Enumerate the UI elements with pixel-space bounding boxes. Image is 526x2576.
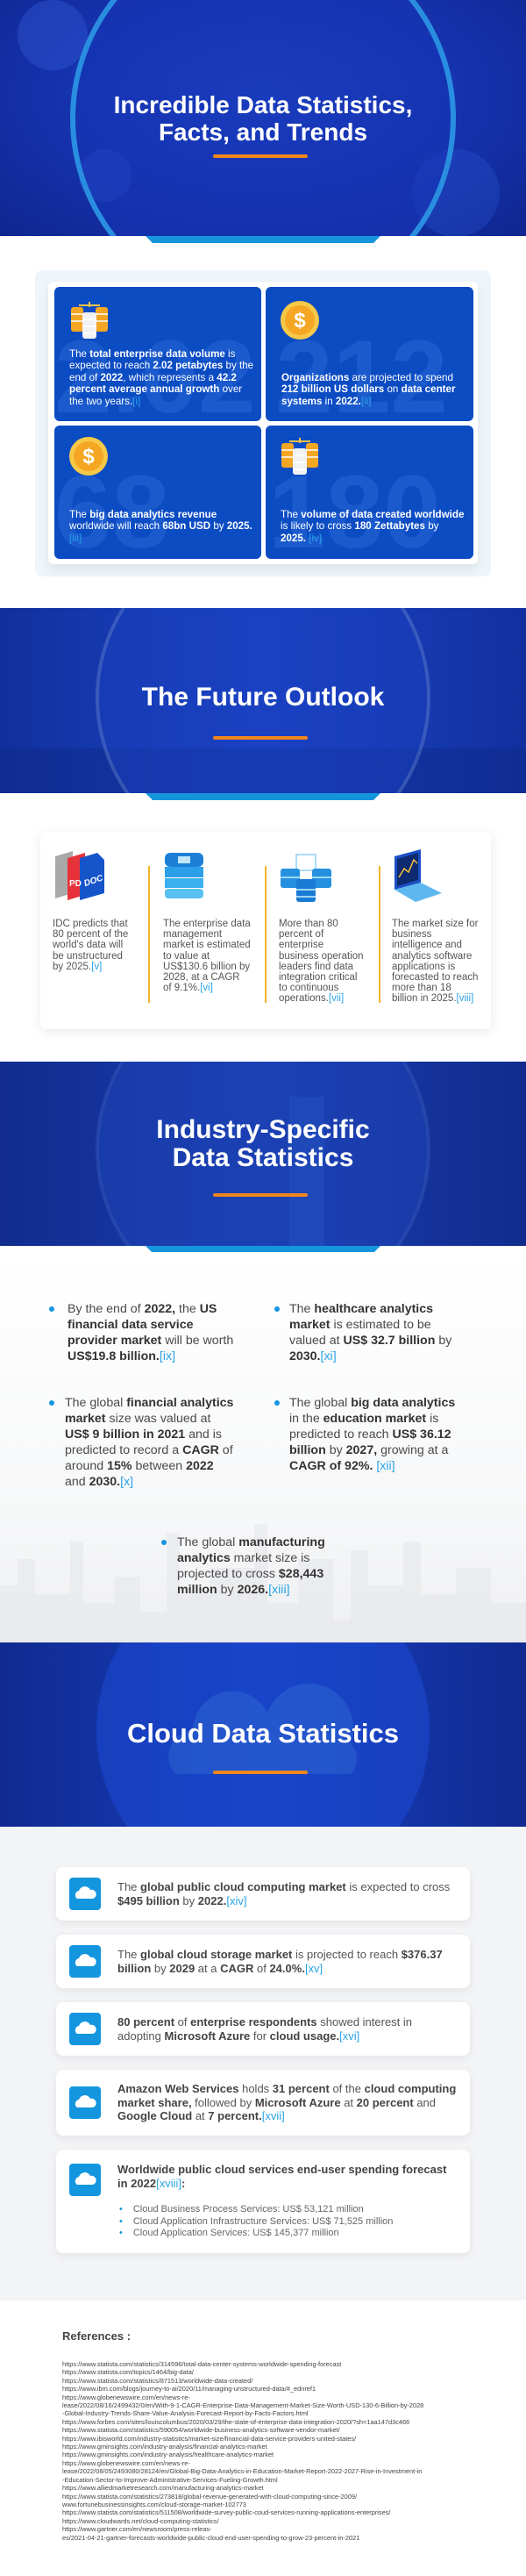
cloud card 2: The global cloud storage market is projected to reach $376.37 billion by 2029 at a CAGR of 24.0%.[xv] xyxy=(117,1948,443,1974)
title xyxy=(156,1115,370,1172)
references list: https://www.statista.com/statistics/273818/global-revenue-generated-with-cloud-computing-since-2009/ xyxy=(62,2492,357,2501)
card: data volume created: The volume of data created worldwide is likely to cross 180 Zettabytes by 2025. [iv] xyxy=(281,509,464,544)
hero title xyxy=(114,91,412,146)
icon: coin: $ xyxy=(294,309,306,333)
references list: https://www.cloudwards.net/cloud-computing-statistics/ xyxy=(62,2517,219,2525)
title: The Future Outlook xyxy=(142,683,384,712)
icon: server cluster xyxy=(281,854,331,902)
references list: lease/2022/08/16/2499432/0/en/With-9-1-CAGR-Enterprise-Data-Management-Market-Size-Worth-USD-130-6-Billion-by-2028 xyxy=(62,2401,423,2409)
card: enterprise data volume: The total enterprise data volume is expected to reach 2.02 petabytes by the end of 2022, which represents a 42.2 percent average annual growth over the two years.[i] xyxy=(69,348,253,407)
icon: coin xyxy=(69,437,108,476)
stat: healthcare analytics: The healthcare analytics market is estimated to be valued at US$ 32.7 billion by 2030.[xi] xyxy=(289,1302,451,1363)
hero title: Incredible Data Statistics, xyxy=(114,91,412,118)
icon: cloud xyxy=(69,1878,101,1910)
cloud card 1 xyxy=(56,1867,470,1921)
text: BI market: The market size for business intelligence and analytics software applications is forecasted to reach more than 18 billion in 2025.[viii] xyxy=(392,919,478,1004)
hero banner xyxy=(0,0,526,236)
icon: documents: DOC xyxy=(82,873,105,889)
references heading: References : xyxy=(62,2329,131,2343)
icon: documents: PD xyxy=(69,879,82,889)
references list: es/2021-04-21-gartner-forecasts-worldwide-public-cloud-end-user-spending-to-grow-23-percent-in-2021 xyxy=(62,2534,359,2542)
references list: https://www.statista.com/statistics/590054/worldwide-business-analytics-software-vendor-market/ xyxy=(62,2426,340,2434)
panel: key stats xyxy=(35,270,491,576)
references list: https://www.statista.com/topics/1464/big-data/ xyxy=(62,2368,194,2376)
title: Data Statistics xyxy=(173,1143,353,1172)
icon: cloud xyxy=(69,2086,101,2119)
card: data center spending: Organizations are projected to spend 212 billion US dollars on data center systems in 2022.[ii] xyxy=(281,372,455,407)
card: big data revenue xyxy=(54,426,261,559)
references list: https://www.gminsights.com/industry-analysis/financial-analytics-market xyxy=(62,2443,267,2451)
stat: education big data: The global big data analytics in the education market is predicted to reach US$ 36.12 billion by 2027, growing at a CAGR of 92%. [xii] xyxy=(289,1396,455,1473)
title: Industry-Specific xyxy=(156,1115,370,1144)
text: data integration: More than 80 percent of enterprise business operation leaders find data integration critical to continuous operations.[vii] xyxy=(279,919,364,1004)
icon: laptop xyxy=(394,849,442,902)
references list: lease/2022/08/05/2493080/28124/en/Global-Big-Data-Analytics-in-Education-Market-Report-2022-2027-Rise-in-Investment-in xyxy=(62,2467,422,2475)
references list: https://www.statista.com/statistics/871513/worldwide-data-created/ xyxy=(62,2377,252,2385)
text: data management: The enterprise data management market is estimated to value at US$130.6 billion by 2028, at a CAGR of 9.1%.[vi] xyxy=(163,919,251,993)
icon: coin xyxy=(281,301,319,340)
icon: database stack xyxy=(71,302,108,339)
cloud card 5: Worldwide public cloud services end-user spending forecast in 2022[xviii]: xyxy=(117,2163,446,2190)
icon: coin: $ xyxy=(82,445,95,469)
icon: database stack xyxy=(281,438,318,475)
references list: www.fortunebusinessinsights.com/cloud-storage-market-102773 xyxy=(62,2501,246,2508)
card: data center spending xyxy=(266,287,473,421)
references list: https://www.forbes.com/sites/louiscolumbus/2020/03/29/the-state-of-enterprise-data-integration-2020/?sh=1aa147d3c466 xyxy=(62,2418,409,2426)
icon: cloud xyxy=(69,2164,101,2196)
banner: Cloud Data Statistics xyxy=(0,1642,526,1827)
references list: https://www.ibm.com/blogs/journey-to-ai/2020/11/managing-unstructured-data/#_ednref1 xyxy=(62,2385,316,2393)
references list: -Global-Industry-Trends-Share-Value-Analysis-Forecast-Report-by-Facts-Factors.html xyxy=(62,2409,309,2417)
stat: US financial data: By the end of 2022, the US financial data service provider market will be worth US$19.8 billion.[ix] xyxy=(68,1302,233,1363)
cloud card 1: The global public cloud computing market is expected to cross $495 billion by 2022.[xiv] xyxy=(117,1880,450,1907)
cloud card 2 xyxy=(56,1935,470,1988)
references list: https://www.gminsights.com/industry-analysis/healthcare-analytics-market xyxy=(62,2451,274,2458)
cloud card 5 xyxy=(56,2150,470,2253)
cloud card 4 xyxy=(56,2070,470,2136)
stat: manufacturing analytics: The global manufacturing analytics market size is projected to cross $28,443 million by 2026.[xiii] xyxy=(177,1535,325,1597)
card: data volume created xyxy=(266,426,473,559)
panel: industry stats background xyxy=(0,1252,526,1642)
references list: https://www.gartner.com/en/newsroom/press-releas- xyxy=(62,2525,211,2533)
icon: cloud xyxy=(69,1945,101,1978)
icon: server xyxy=(165,853,203,898)
stat: financial analytics: The global financial analytics market size was valued at US$ 9 billion in 2021 and is predicted to record a CAGR of around 15% between 2022 and 2030.[x] xyxy=(65,1396,233,1489)
references list: https://www.globenewswire.com/en/news-re- xyxy=(62,2394,190,2401)
banner: Industry-Specific Data Statistics xyxy=(0,1062,526,1246)
references list: https://www.globenewswire.com/en/news-re- xyxy=(62,2459,190,2467)
references list: https://www.ibisworld.com/industry-statistics/market-size/financial-data-service-providers-united-states/ xyxy=(62,2435,356,2443)
panel: future outlook xyxy=(40,832,491,1029)
icon: documents xyxy=(55,851,105,900)
spending list: • Cloud Business Process Services: US$ 53,121 million xyxy=(119,2204,364,2215)
references list xyxy=(62,2360,423,2542)
cloud card 3: 80 percent of enterprise respondents showed interest in adopting Microsoft Azure for cloud usage.[xvi] xyxy=(117,2015,412,2043)
cloud card 3 xyxy=(56,2002,470,2056)
panel: cloud stats background xyxy=(0,1827,526,2301)
spending list xyxy=(119,2204,393,2238)
text: unstructured data: IDC predicts that 80 percent of the world's data will be unstructured by 2025.[v] xyxy=(53,919,128,972)
spending list: • Cloud Application Services: US$ 145,377 million xyxy=(119,2228,339,2238)
references list: https://www.statista.com/statistics/511508/worldwide-survey-public-coud-services-running-applications-enterprises/ xyxy=(62,2508,390,2516)
icon: cloud xyxy=(69,2013,101,2045)
references list: -Education-Sector-to-Improve-Administrative-Services-Fueling-Growth.html xyxy=(62,2476,278,2484)
banner: The Future Outlook xyxy=(0,608,526,793)
cloud card 4: Amazon Web Services holds 31 percent of the cloud computing market share, followed by Microsoft Azure at 20 percent and Google Cloud at 7 percent.[xvii] xyxy=(117,2082,456,2122)
references list: https://www.statista.com/statistics/314596/total-data-center-systems-worldwide-spending-forecast xyxy=(62,2360,341,2368)
references list: https://www.alliedmarketresearch.com/manufacturing-analytics-market xyxy=(62,2484,264,2492)
spending list: • Cloud Application Infrastructure Services: US$ 71,525 million xyxy=(119,2216,393,2227)
title: Cloud Data Statistics xyxy=(127,1718,399,1749)
hero title: Facts, and Trends xyxy=(159,118,367,146)
card: big data revenue: The big data analytics revenue worldwide will reach 68bn USD by 2025. [iii] xyxy=(69,509,252,544)
